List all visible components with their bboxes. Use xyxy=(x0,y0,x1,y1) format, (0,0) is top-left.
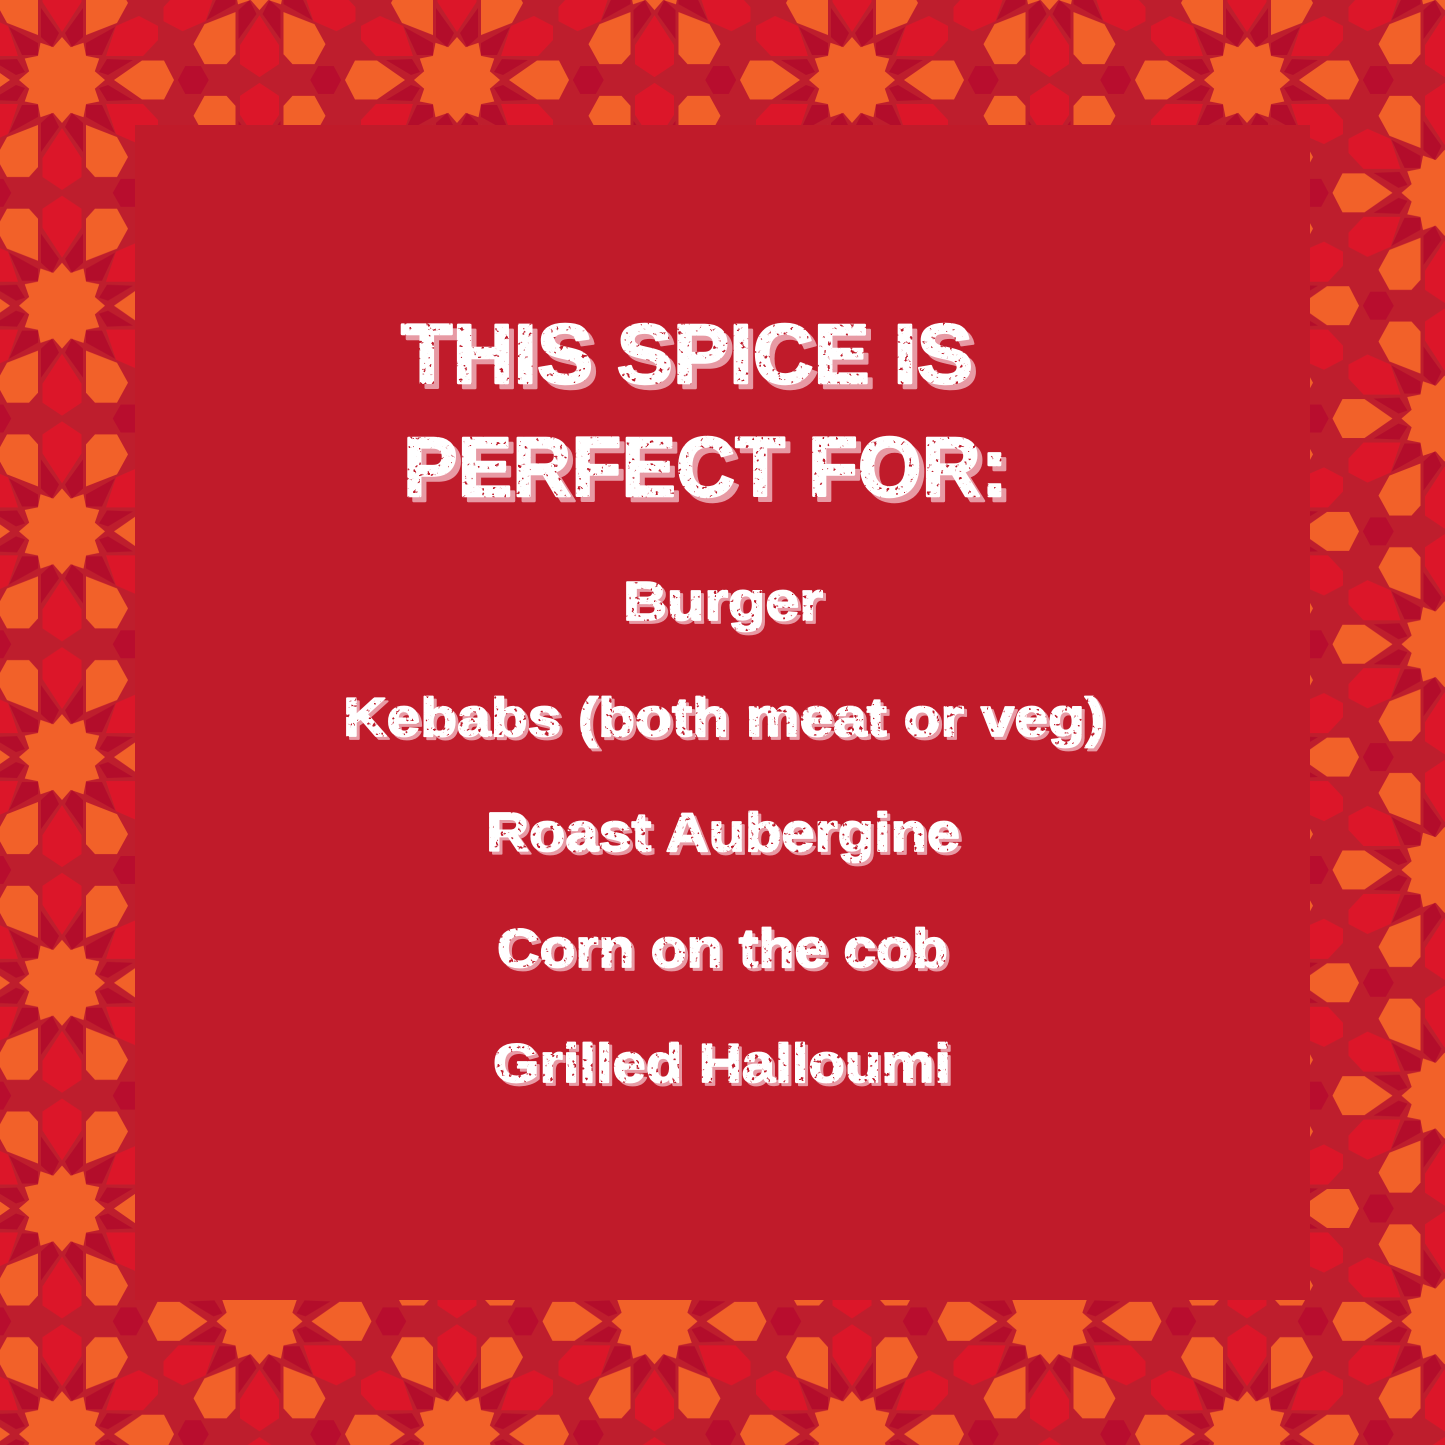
heading: this spice is perfect for: PERFECT FOR: xyxy=(403,420,1008,514)
list item: roast aubergine: Roast Aubergine xyxy=(486,801,960,863)
panel: central red square xyxy=(135,125,1310,1300)
list item: corn on the cob: Corn on the cob xyxy=(497,917,948,979)
heading: this spice is perfect for xyxy=(401,307,1008,514)
list item: burger: Burger xyxy=(623,570,823,632)
list item: kebabs: Kebabs (both meat or veg) xyxy=(343,686,1105,748)
list of dishes xyxy=(343,570,1105,1094)
list item: grilled halloumi: Grilled Halloumi xyxy=(493,1032,951,1094)
heading: this spice is perfect for: THIS SPICE IS xyxy=(401,307,973,401)
